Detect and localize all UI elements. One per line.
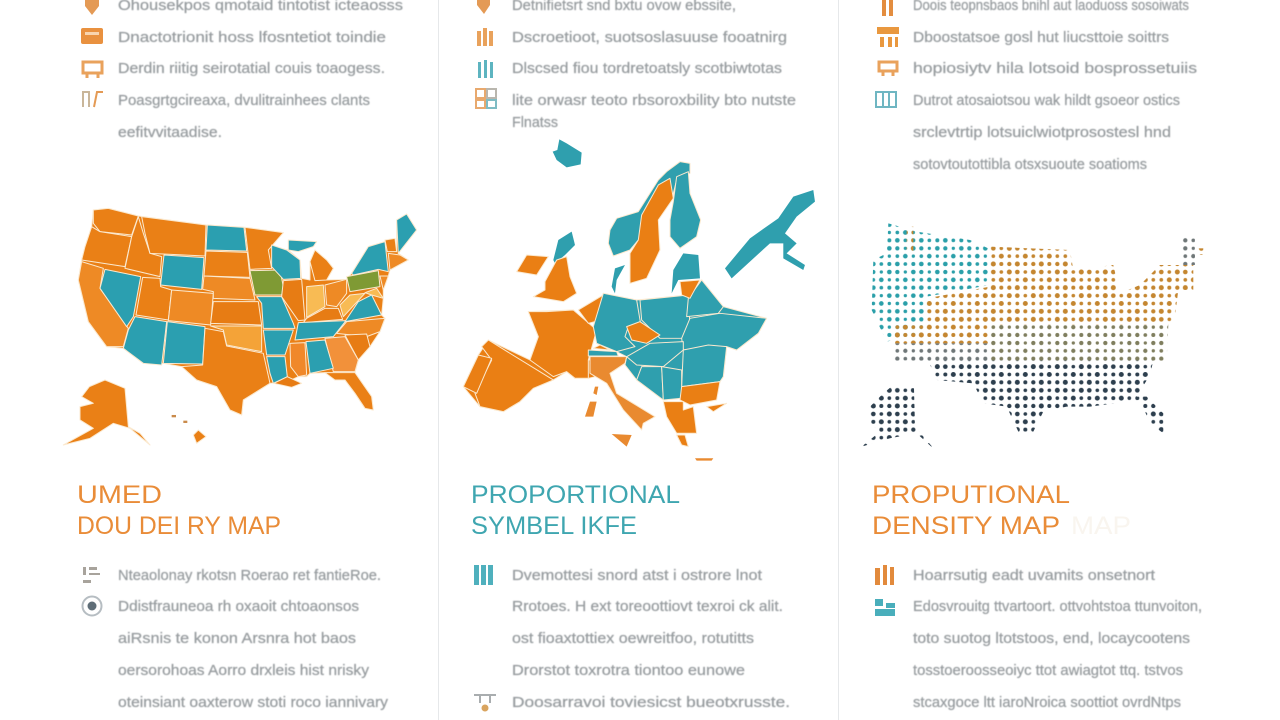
panel: proportional symbol map column (463, 0, 815, 712)
description text line 2: Ddistfrauneoa rh oxaoit chtoaonsos (118, 598, 359, 615)
feature text line 3: Derdin riitig seirotatial couis toaogess. (118, 60, 385, 77)
heading: density map (872, 481, 1131, 540)
feature text line 2: Dnactotrionit hoss lfosntetiot toindie (118, 29, 386, 46)
icon: target circle (82, 596, 102, 616)
description text line 4: oersorohoas Aorro drxleis hist nrisky (118, 662, 370, 679)
icon: orange bars (875, 565, 894, 585)
heading: proportional symbol map (471, 481, 680, 540)
top feature list (876, 0, 1197, 173)
feature text line 5: Flnatss (512, 114, 558, 131)
heading: choropleth map (77, 481, 281, 540)
description text line 5: stcaxgoce ltt iaroNroica soottiot ovrdNtps (913, 694, 1181, 711)
feature text line 5: eefitvvitaadise. (118, 124, 222, 141)
heading: density map: DENSITY MAP (872, 512, 1060, 540)
icon: squares (476, 89, 496, 108)
feature text line 3: Dlscsed fiou tordretoatsly scotbiwtotas (512, 60, 782, 77)
icon: small glyph (83, 567, 100, 583)
icon: orange block (877, 27, 899, 47)
description text line 3: toto suotog ltotstoos, end, locaycootens (913, 630, 1190, 647)
icon: bars (83, 92, 103, 107)
feature text line 4: Dutrot atosaiotsou wak hildt gsoeor ostics (913, 92, 1180, 109)
icon: table (83, 62, 102, 78)
description text line 1: Hoarrsutig eadt uvamits onsetnort (913, 567, 1156, 584)
icon: shield (85, 0, 99, 15)
icon: teal glyph (875, 599, 895, 616)
description text line 3: aiRsnis te konon Arsnra hot baos (118, 630, 356, 647)
heading: choropleth map: UMED (77, 481, 162, 509)
icon: teal bars (478, 60, 493, 78)
bottom feature list (474, 565, 790, 712)
bottom feature list (875, 565, 1202, 711)
feature text line 5: srclevtrtip lotsuiclwiotprosostesl hnd (913, 124, 1171, 141)
icon: teal bars (474, 565, 493, 585)
feature text line 2: Dboostatsoe gosl hut liucsttoie soittrs (913, 29, 1169, 46)
icon: orange table (879, 62, 897, 76)
heading: proportional symbol map: PROPORTIONAL (471, 481, 680, 509)
icon: shield (477, 0, 490, 14)
description text line 2: Edosvrouitg ttvartoort. ottvohtstoa ttunvoiton, (913, 598, 1202, 615)
description text line 4: tosstoeroosseoiyc ttot awiagtot ttq. tstvos (913, 662, 1183, 679)
feature text line 4: Poasgrtgcireaxa, dvulitrainhees clants (118, 92, 370, 109)
heading: choropleth map: DOU DEI RY MAP (77, 512, 281, 540)
description text line 3: ost fioaxtottiex oewreitfoo, rotutitts (512, 630, 754, 647)
feature text line 3: hopiosiytv hila lotsoid bosprossetuiis (913, 60, 1197, 77)
heading: density map: PROPUTIONAL (872, 481, 1070, 509)
feature text line 2: Dscroetioot, suotsoslasuuse fooatnirg (512, 29, 787, 46)
feature text line 4: lite orwasr teoto rbsoroxbility bto nutste (512, 92, 796, 109)
choropleth map of Europe (463, 139, 815, 461)
description text line 5: Doosarravoi toviesicst bueotxrusste. (512, 694, 790, 711)
panel: density map column (862, 0, 1203, 711)
description text line 1: Nteaolonay rkotsn Roerao ret fantieRoe. (118, 567, 381, 584)
top feature list (476, 0, 796, 131)
icon: teal grid (876, 92, 896, 107)
icon: gauge table (474, 695, 496, 712)
icon: orange bars (882, 0, 893, 16)
panel: choropleth map column (63, 0, 417, 711)
icon: orange card (81, 28, 103, 44)
description text line 1: Dvemottesi snord atst i ostrore lnot (512, 567, 763, 584)
description text line 4: Drorstot toxrotra tiontoo eunowe (512, 662, 745, 679)
heading: proportional symbol map: SYMBEL IKFE (471, 512, 637, 540)
icon: orange bars (477, 28, 493, 46)
dot density map of the United States (862, 223, 1203, 450)
description text line 5: oteinsiant oaxterow stoti roco iannivary (118, 694, 389, 711)
bottom feature list (82, 567, 389, 711)
choropleth map of the United States (63, 208, 417, 445)
description text line 2: Rrotoes. H ext toreoottiovt texroi ck alit. (512, 598, 783, 615)
top feature list (81, 0, 403, 141)
heading: density map: MAP (1071, 512, 1131, 540)
feature text line 6: sotovtoutottibla otsxsuoute soatioms (913, 156, 1147, 173)
